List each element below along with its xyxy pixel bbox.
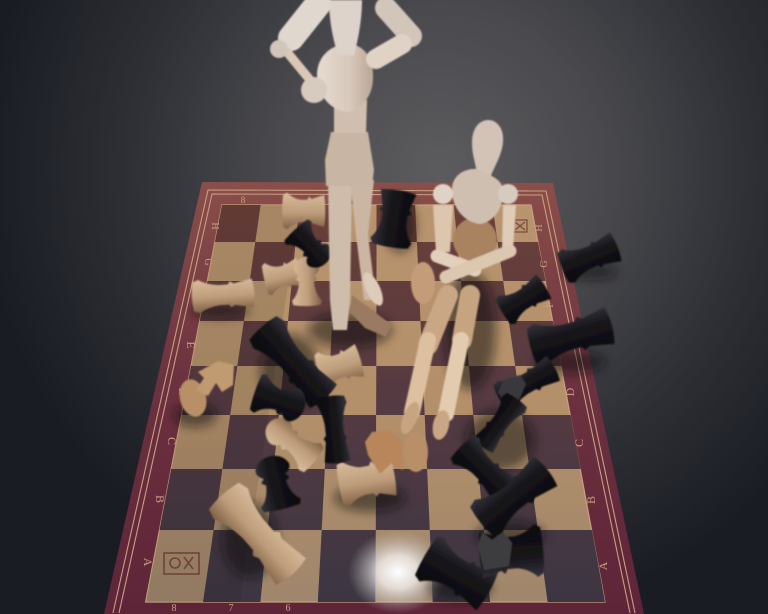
black piece with knight bbox=[491, 354, 563, 413]
board coordinate letters: F bbox=[195, 302, 206, 308]
standing head bbox=[329, 0, 362, 55]
black queen long bbox=[246, 313, 341, 412]
black pawn lower-left bbox=[250, 452, 302, 514]
white pawn centre bbox=[313, 341, 366, 391]
standing right arm bbox=[376, 8, 411, 59]
board coordinate letters: A bbox=[141, 558, 155, 567]
maker stamp bottom-left bbox=[164, 553, 199, 574]
seated arms bbox=[433, 205, 516, 277]
board coordinate letters: E bbox=[551, 341, 565, 349]
white round piece near mannequin bbox=[411, 262, 435, 304]
standing abdomen bbox=[334, 100, 367, 133]
board coordinate letters: G bbox=[539, 260, 550, 268]
black queen right bbox=[525, 304, 618, 368]
board coordinate letters: F bbox=[545, 302, 556, 308]
standing chest bbox=[317, 44, 373, 112]
seated mannequin bbox=[397, 120, 518, 441]
standing mannequin bbox=[270, 0, 411, 337]
standing pelvis bbox=[325, 132, 374, 186]
board border bbox=[104, 182, 644, 614]
board coordinate letters: C bbox=[572, 439, 586, 447]
board coordinate letters: B bbox=[584, 496, 598, 504]
white knight left bbox=[176, 361, 234, 420]
standing far shin bbox=[350, 295, 392, 337]
white pawn upright bbox=[291, 257, 322, 306]
dark squares bbox=[160, 205, 605, 602]
standing left elbow bbox=[270, 40, 288, 58]
black knight bottom bbox=[477, 524, 546, 582]
board lighting bbox=[146, 205, 300, 602]
seated belly bbox=[453, 218, 497, 262]
board coordinate letters: A bbox=[596, 561, 610, 570]
black queen off-board right bbox=[555, 229, 624, 285]
board coordinate letters: D bbox=[176, 388, 190, 397]
chessboard bbox=[104, 182, 644, 614]
standing left arm bbox=[287, 4, 318, 86]
board coordinate letters: C bbox=[165, 437, 179, 445]
board coordinate letters: H bbox=[209, 222, 220, 230]
black piece right B bbox=[448, 433, 518, 503]
standing left hand ball bbox=[301, 77, 327, 103]
border inlay lines bbox=[113, 190, 635, 613]
board coordinate letters: 6 bbox=[286, 603, 290, 614]
board coordinate letters: 8 bbox=[241, 195, 246, 205]
seated chest bbox=[452, 169, 503, 224]
black queen lower right bbox=[467, 453, 561, 540]
glare on board bbox=[348, 530, 448, 614]
white bishop left bbox=[191, 276, 256, 314]
white rook top bbox=[282, 193, 325, 229]
black pieces bbox=[246, 187, 624, 614]
board coordinate letters: E bbox=[184, 341, 198, 349]
maker stamp top-right bbox=[513, 220, 527, 232]
seated feet bbox=[397, 400, 423, 436]
white pawn lying bbox=[258, 410, 326, 474]
standing legs bbox=[328, 180, 352, 330]
seated shoulders bbox=[433, 184, 453, 204]
white knight centre bbox=[365, 430, 428, 474]
board coordinate letters: 7 bbox=[228, 603, 234, 614]
white queen large bbox=[205, 479, 310, 589]
standing foot bbox=[359, 270, 387, 308]
board coordinate letters: D bbox=[563, 387, 577, 396]
light squares bbox=[146, 205, 605, 602]
board coordinate letters: H bbox=[534, 224, 545, 232]
black pawn left bbox=[248, 372, 311, 428]
black knight grey head bbox=[498, 375, 526, 403]
white rook lying bbox=[335, 453, 399, 508]
black rook bottom bbox=[412, 533, 502, 614]
board coordinate letters: G bbox=[202, 258, 213, 266]
board coordinate letters bbox=[141, 195, 610, 614]
white piece mid-left bbox=[261, 256, 304, 296]
black rook top bbox=[369, 187, 419, 250]
black knight grey head bottom bbox=[478, 532, 512, 570]
board coordinate letters: B bbox=[153, 495, 167, 503]
seated legs bbox=[412, 295, 470, 414]
black piece under knee bbox=[493, 272, 554, 327]
seated head bbox=[472, 120, 503, 178]
cast shadows bbox=[173, 197, 618, 602]
black slim piece bbox=[316, 394, 353, 465]
black pawn top-left bbox=[282, 218, 339, 275]
black piece right A bbox=[471, 391, 529, 455]
board coordinate letters: 8 bbox=[172, 603, 176, 614]
white pieces bbox=[176, 193, 435, 589]
